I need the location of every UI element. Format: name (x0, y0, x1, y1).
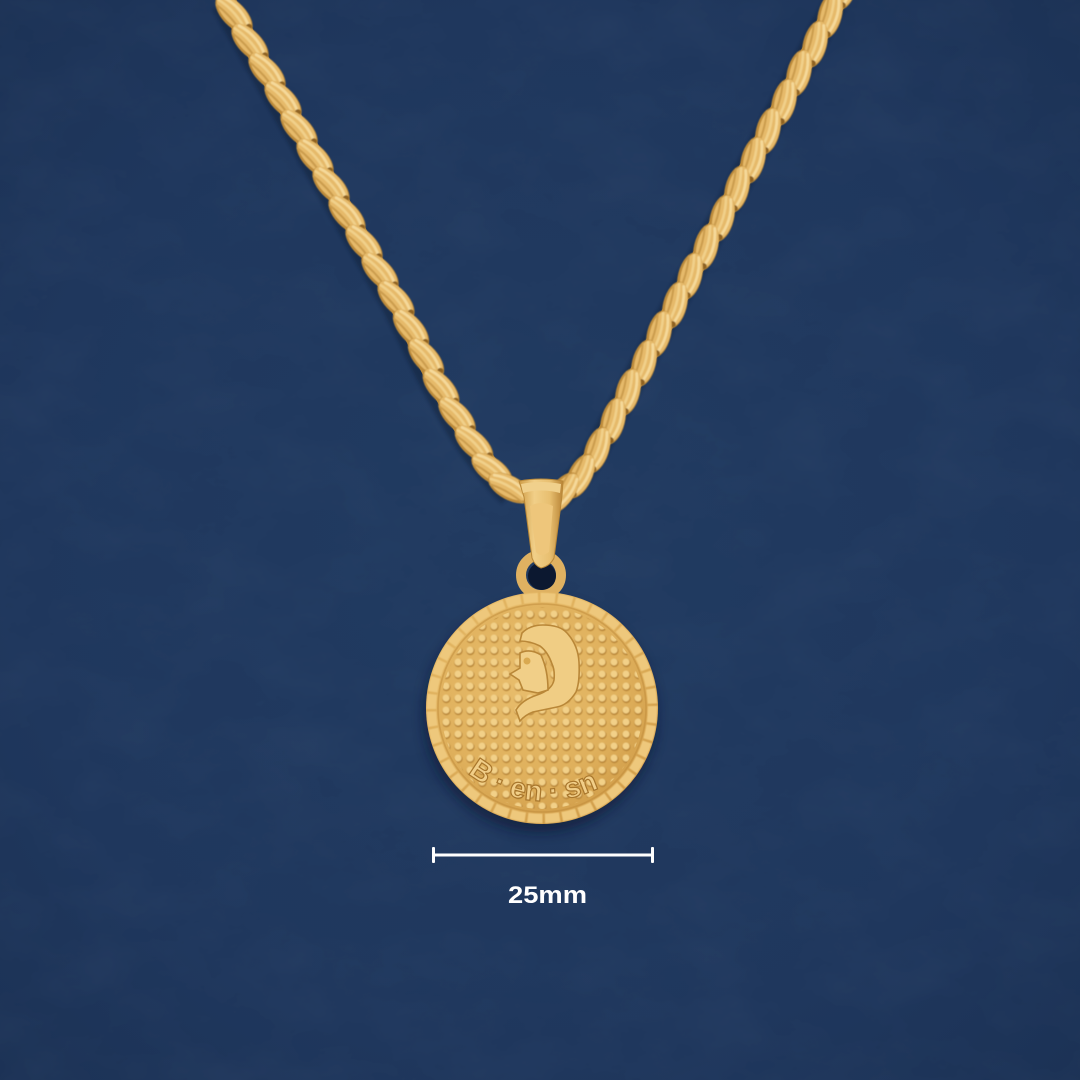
embossed profile portrait (510, 625, 579, 721)
pendant (420, 478, 660, 836)
embossed coin inscription: B · en · sn (468, 757, 598, 802)
size scale bar (432, 847, 654, 863)
jump ring (521, 555, 561, 595)
size label: 25mm (508, 882, 587, 909)
coin body (426, 592, 658, 824)
rope chain: left strand (190, 0, 541, 518)
dotted texture field (440, 606, 644, 810)
rope chain: right strand (531, 0, 873, 523)
pendant shadow (424, 600, 656, 832)
bail (519, 479, 563, 568)
